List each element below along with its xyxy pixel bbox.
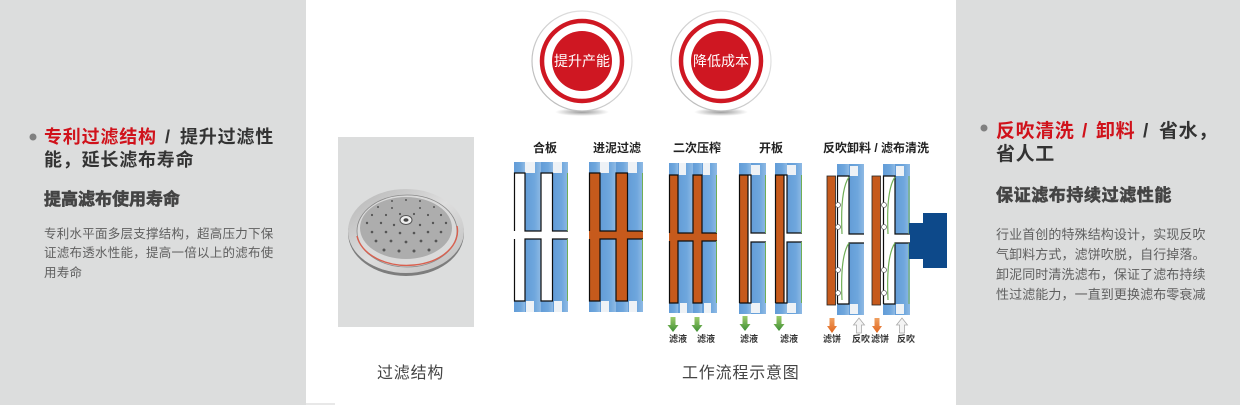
body text: 气卸料方式，滤饼吹脱，自行掉落。: [996, 247, 1206, 262]
arrows: cake discharge: [827, 318, 882, 333]
caption: process diagram: 工作流程示意图: [682, 363, 800, 382]
arrows: filtrate: [740, 316, 784, 331]
step 5: back-blow discharge and cloth cleaning: 反吹: [897, 333, 915, 344]
step 3: secondary press: [668, 140, 721, 344]
step 5: back-blow discharge and cloth cleaning: 滤饼: [823, 333, 841, 344]
arrows: filtrate: [668, 317, 702, 332]
body text: 行业首创的特殊结构设计，实现反吹: [996, 227, 1206, 242]
badge: reduce cost: 降低成本: [693, 53, 749, 69]
arrows: back-blow air: [854, 318, 908, 333]
step 4: plates open: 开板: [759, 140, 783, 155]
body text: 证滤布透水性能，提高一倍以上的滤布使: [44, 245, 274, 260]
step 4: plates open: 滤液: [780, 333, 798, 344]
step 5: back-blow discharge and cloth cleaning: 反吹卸料 / 滤布清洗: [823, 140, 929, 155]
heading: back-blow cleaning: /: [1143, 121, 1149, 142]
step 4: plates open: [739, 140, 802, 344]
body text: 用寿命: [44, 265, 83, 280]
heading second line: 能，延长滤布寿命: [44, 149, 194, 170]
caption: filter structure: 过滤结构: [377, 364, 444, 382]
bullet: [30, 134, 36, 140]
filter cloth curves: [842, 177, 895, 300]
step 5: back-blow discharge and cloth cleaning: 滤饼: [871, 333, 889, 344]
heading: back-blow cleaning: 省水，: [1159, 120, 1218, 142]
step 1: plates closed: 合板: [533, 140, 557, 155]
step 2: sludge feed: 进泥过滤: [593, 140, 641, 155]
step 1: plates closed: [514, 140, 568, 312]
body text: [996, 227, 1206, 302]
step 2: sludge feed: [589, 140, 643, 312]
plate drainage holes: [366, 199, 447, 252]
photo: filter plate: [338, 137, 474, 327]
step 5: back-blow discharge and cloth cleaning: [823, 140, 947, 344]
body text: [44, 226, 274, 280]
subheading: 保证滤布持续过滤性能: [996, 186, 1172, 205]
badge: reduce cost: [671, 11, 771, 116]
badge: raise capacity: 提升产能: [554, 53, 610, 69]
subheading: 提高滤布使用寿命: [44, 189, 180, 209]
heading: patented filter structure: /: [165, 127, 171, 147]
step 3: secondary press: 二次压榨: [673, 140, 721, 155]
heading: back-blow cleaning: 反吹清洗: [996, 120, 1074, 142]
step 3: secondary press: 滤液: [669, 333, 687, 344]
heading: back-blow cleaning: /: [1082, 121, 1088, 142]
heading: patented filter structure: 专利过滤结构: [44, 126, 157, 147]
step 5: back-blow discharge and cloth cleaning: 反吹: [852, 333, 870, 344]
heading: patented filter structure: 提升过滤性: [180, 126, 274, 147]
body text: 性过滤能力，一直到更换滤布零衰减: [996, 287, 1206, 302]
air cylinder: [909, 213, 947, 268]
step 3: secondary press: 滤液: [697, 333, 715, 344]
step 4: plates open: 滤液: [740, 333, 758, 344]
heading: back-blow cleaning: 卸料: [1096, 120, 1135, 142]
heading second line: 省人工: [996, 143, 1055, 165]
panel: left benefit: [0, 0, 335, 405]
body text: 卸泥同时清洗滤布，保证了滤布持续: [996, 267, 1206, 282]
badge: raise capacity: [532, 11, 632, 116]
body text: 专利水平面多层支撑结构，超高压力下保: [44, 226, 274, 241]
bullet: [980, 124, 988, 132]
panel: right benefit: [956, 0, 1240, 405]
